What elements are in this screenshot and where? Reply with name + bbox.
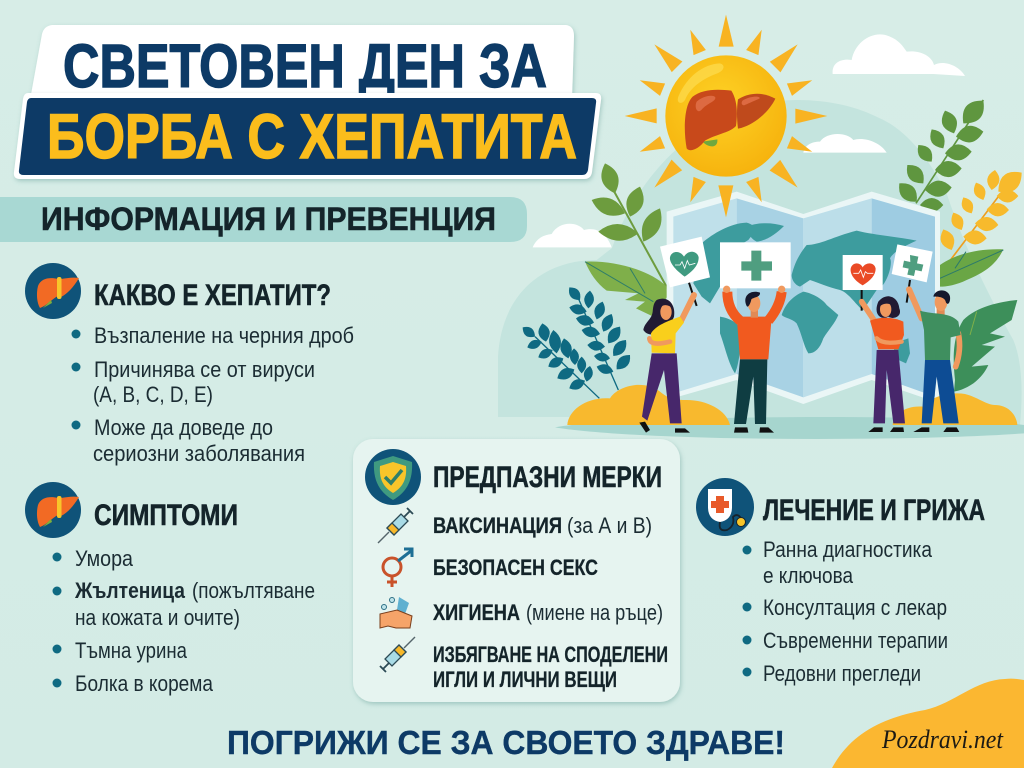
item: vaccination: ВАКСИНАЦИЯ (433, 513, 562, 538)
illustration: sun, map, people and plants (498, 15, 1024, 439)
site name: Pozdravi.net (881, 725, 1004, 754)
bullets (742, 537, 948, 686)
heading: prevention: ПРЕДПАЗНИ МЕРКИ (433, 461, 662, 494)
bullets (52, 546, 315, 696)
item: avoid sharing needles (433, 642, 668, 692)
subtitle band: ИНФОРМАЦИЯ И ПРЕВЕНЦИЯ (41, 201, 496, 237)
plant: yellow-green leaf (940, 249, 1003, 287)
bullets: сериозни заболявания (93, 441, 305, 466)
section: what is hepatitis (25, 263, 354, 466)
icon: stethoscope (696, 478, 754, 536)
bullets: Възпаление на черния дроб (94, 323, 354, 348)
item: avoid sharing needles: ИЗБЯГВАНЕ НА СПОДЕЛЕНИ (433, 642, 668, 667)
item: avoid sharing needles: ИГЛИ И ЛИЧНИ ВЕЩИ (433, 667, 617, 692)
background hills (498, 100, 1022, 425)
icon: liver (25, 482, 81, 538)
item: hygiene: ХИГИЕНА (433, 600, 520, 625)
panel: prevention (353, 439, 680, 702)
bullets: е ключова (763, 563, 854, 588)
sign: red heart (843, 255, 883, 311)
item: hygiene: (миене на ръце) (526, 600, 663, 625)
bullets: на кожата и очите) (75, 605, 240, 630)
plant: teal branches (523, 287, 630, 398)
bush: right yellow (893, 393, 1017, 425)
bullets: Тъмна урина (75, 638, 188, 663)
icon: liver (25, 263, 81, 319)
title: navy band: БОРБА С ХЕПАТИТА (47, 102, 577, 172)
bullets: Причинява се от вируси (94, 357, 315, 382)
person: woman in orange (862, 296, 905, 432)
bullets: Съвременни терапии (763, 628, 948, 653)
cloud: top right (833, 34, 965, 76)
sign: small cross (892, 244, 933, 303)
icon: washing hands (380, 597, 412, 628)
bullets: Умора (75, 546, 134, 571)
continents (693, 223, 917, 373)
plant: big right leaf (954, 300, 1017, 392)
ground shadow (555, 417, 1024, 439)
section: symptoms (25, 482, 315, 696)
bullets: Редовни прегледи (763, 661, 921, 686)
cloud: beside sun (803, 134, 887, 153)
sun (625, 15, 827, 217)
item: hygiene (433, 600, 663, 625)
bullets (72, 323, 354, 466)
corner: yellow blob with site name (832, 679, 1024, 768)
icon: syringe (380, 637, 415, 672)
plant: yellow branch (941, 170, 1022, 272)
icon: shield (365, 449, 421, 505)
icon: syringe (378, 508, 413, 543)
plant: left green branch (592, 163, 668, 290)
plant: big left leaf (585, 261, 667, 317)
person: man in orange (723, 286, 785, 433)
icon: gender symbol (383, 549, 412, 587)
footer slogan: ПОГРИЖИ СЕ ЗА СВОЕТО ЗДРАВЕ! (227, 724, 785, 761)
title: navy band (14, 93, 601, 179)
bush: left yellow (567, 385, 730, 425)
bullets: Жълтеница (74, 578, 186, 603)
world map (667, 192, 940, 404)
bullets: Ранна диагностика (763, 537, 933, 562)
bullets: Консултация с лекар (763, 595, 947, 620)
plant: top right green branch (899, 100, 984, 212)
person: man in green (909, 289, 961, 432)
person: woman in yellow (639, 295, 694, 433)
bullets: (пожълтяване (192, 578, 315, 603)
heading: symptoms: СИМПТОМИ (94, 499, 238, 532)
cloud: left (533, 224, 612, 247)
sign: green cross (720, 242, 791, 288)
section: treatment (696, 478, 985, 686)
bullets: Болка в корема (75, 671, 214, 696)
bullets: (A, B, C, D, E) (93, 382, 213, 407)
sign: green heart (660, 237, 710, 306)
title: white panel: СВЕТОВЕН ДЕН ЗА (63, 32, 547, 100)
item: safe sex: БЕЗОПАСЕН СЕКС (433, 555, 598, 580)
liver on the sun (685, 90, 775, 150)
item: vaccination: (за А и В) (567, 513, 652, 538)
heading: what is hepatitis: КАКВО Е ХЕПАТИТ? (94, 279, 331, 312)
bullets: Може да доведе до (94, 415, 273, 440)
